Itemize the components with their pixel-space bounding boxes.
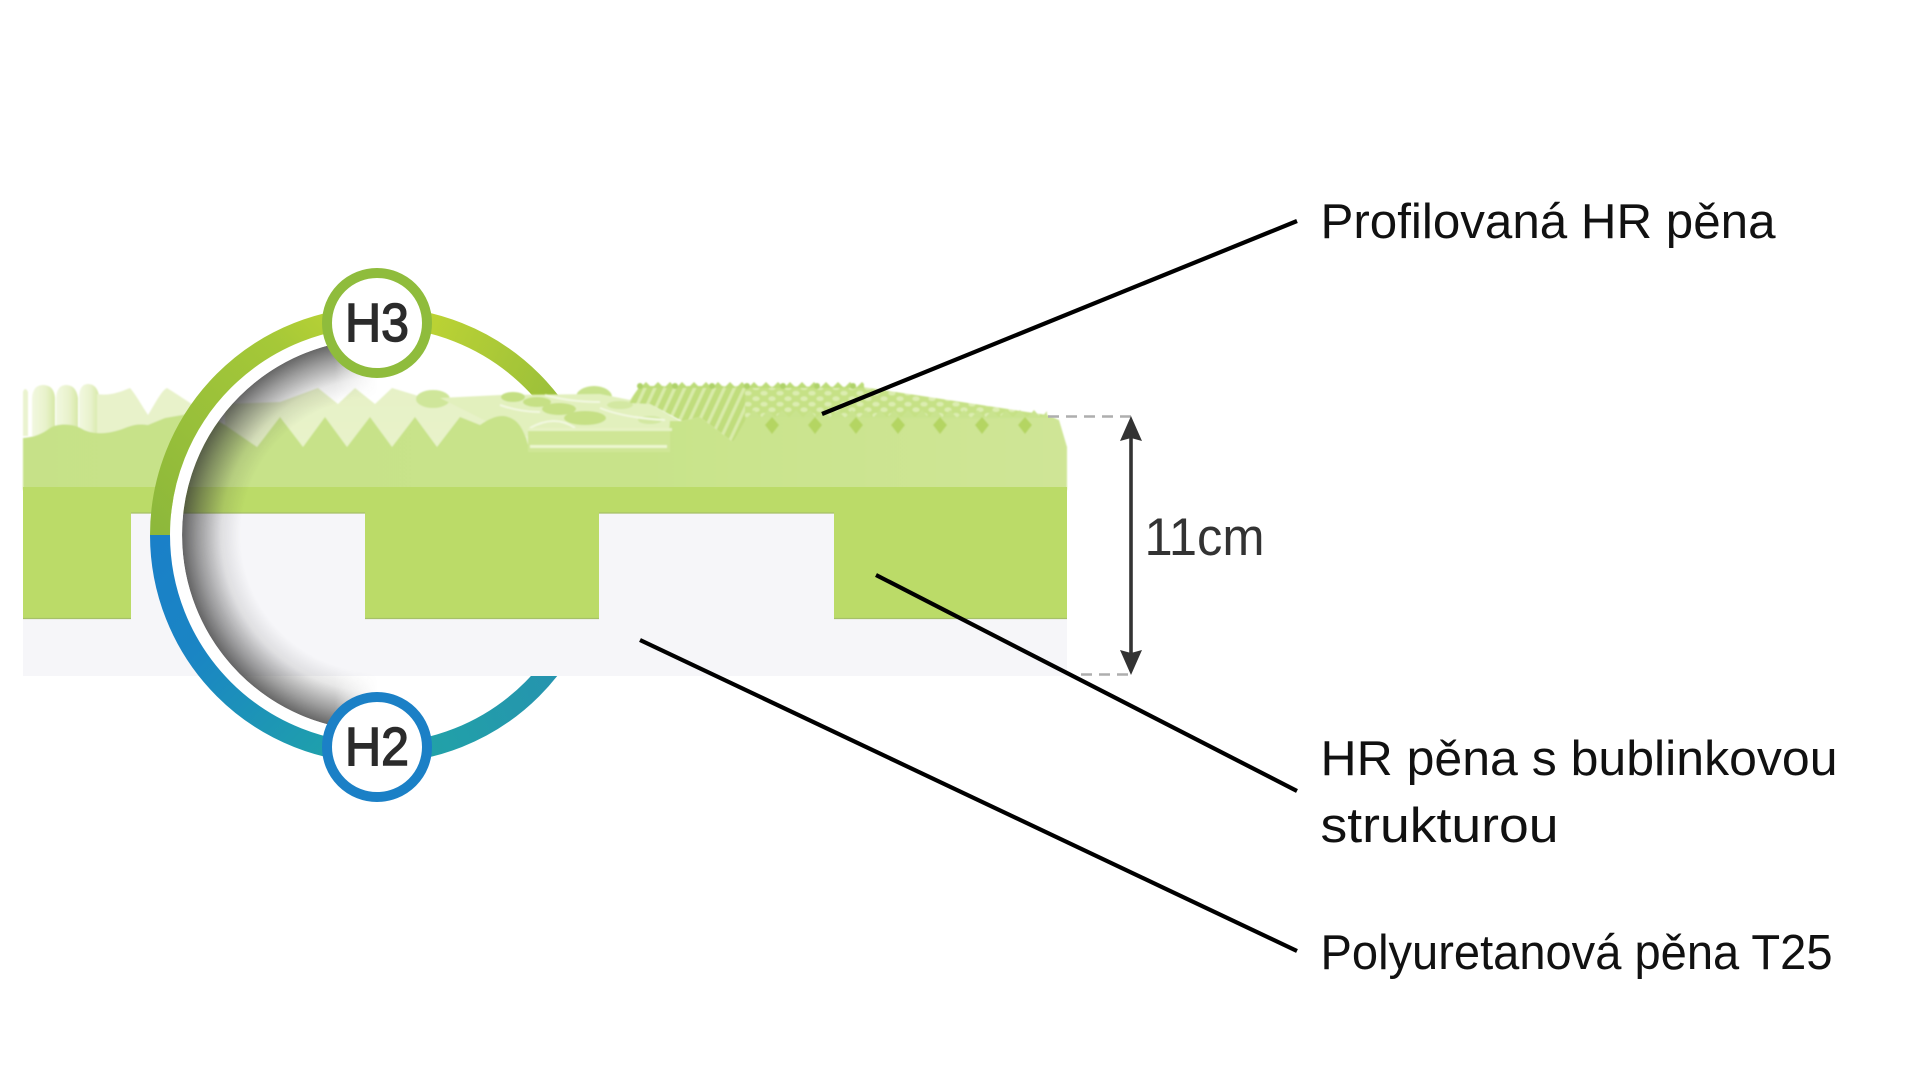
hump above bubble surface <box>416 390 450 408</box>
egg-crate rear ridge <box>640 381 864 388</box>
label: Polyuretanová pěna T25: Polyuretanová pěna T25 <box>1320 926 1832 980</box>
foam base with zigzag top <box>23 412 1067 490</box>
arrowhead: top <box>1120 416 1142 441</box>
H2 blue arc <box>160 535 378 753</box>
badge: H2 <box>327 697 427 797</box>
arrowhead: bottom <box>1120 650 1142 675</box>
pale peaks on the left <box>23 384 225 445</box>
label: HR pěna s bublinkovou strukturou <box>1320 732 1838 853</box>
layer: bubble-structure HR foam <box>23 487 1067 618</box>
shaded inner hollow <box>182 339 378 731</box>
badge: H3 <box>327 273 427 373</box>
pale zigzag teeth <box>225 388 530 452</box>
firmness ring: right arcs behind mattress <box>378 317 596 753</box>
egg-crate front serration <box>747 409 1047 418</box>
label: Profilovaná HR pěna: Profilovaná HR pěna <box>1320 195 1776 249</box>
mattress cross-section <box>23 381 1067 676</box>
badge: H3: H3 <box>345 293 409 353</box>
layer: profiled HR foam <box>23 381 1067 490</box>
firmness ring: left arc <box>160 317 378 753</box>
egg-crate stripes <box>628 386 748 442</box>
callout line: bubble foam <box>876 575 1297 791</box>
white inner ring <box>176 333 378 737</box>
bright bar <box>530 445 667 448</box>
callout line: profiled foam <box>822 221 1297 414</box>
callout line: polyurethane foam <box>640 640 1297 951</box>
label: HR pěna s bublinkovou strukturou: HR pěna s bublinkovou <box>1320 732 1838 786</box>
height dimension: 11cm <box>1048 416 1264 675</box>
label: 11cm: 11cm <box>1144 508 1264 567</box>
badge: H2: H2 <box>345 717 409 777</box>
front-row egg-crate dots <box>765 417 1032 434</box>
bubble front wall <box>528 430 670 452</box>
H3 green arc <box>160 317 378 535</box>
egg-crate dotted surface <box>745 386 1059 430</box>
label: HR pěna s bublinkovou strukturou: strukturou <box>1320 799 1558 853</box>
layer: polyurethane foam T25 <box>23 513 1067 676</box>
bubble surface <box>440 392 680 436</box>
egg-crate ridge bumps <box>637 383 856 389</box>
